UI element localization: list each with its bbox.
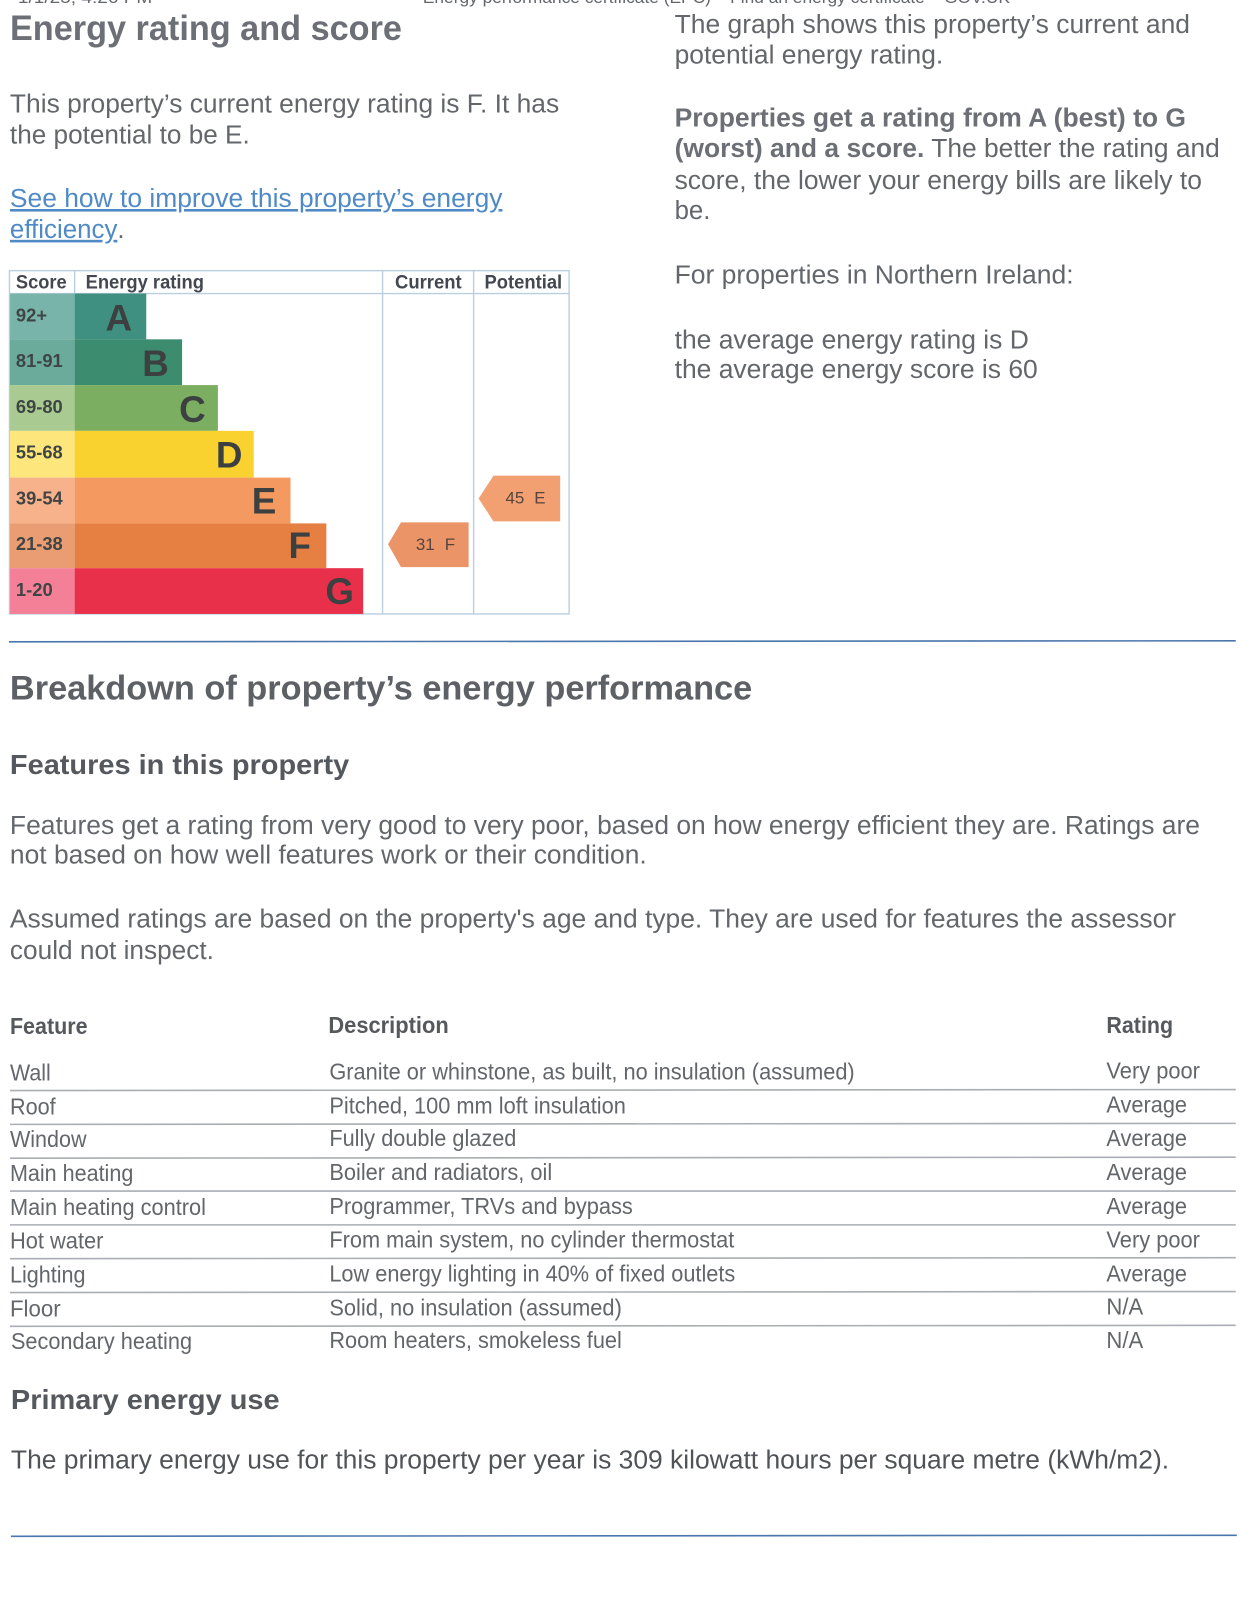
text block: graph explanation: potential energy rating.: [675, 42, 943, 70]
text block: features explanation: Assumed ratings are based on the property's age and type. They are used for features the assessor: [10, 905, 1176, 933]
clipped browser print header: [18, 0, 1011, 7]
row: hot water: From main system, no cylinder thermostat: [329, 1227, 735, 1253]
band D: 55-68: [16, 442, 63, 463]
arrow: potential rating 45 E: 45: [505, 488, 524, 507]
chart header row: Potential: [485, 272, 562, 294]
row: wall: [10, 1058, 1200, 1086]
text block: Northern Ireland averages: the average energy score is 60: [675, 356, 1038, 384]
row: wall: Granite or whinstone, as built, no insulation (assumed): [329, 1059, 855, 1085]
row: main heating: Boiler and radiators, oil: [329, 1159, 552, 1185]
band A: [10, 294, 146, 339]
row: main heating control: Average: [1106, 1193, 1187, 1219]
row: secondary heating: Room heaters, smokeless fuel: [329, 1327, 622, 1353]
row: hot water: [10, 1227, 1200, 1254]
text block: Northern Ireland averages: [675, 262, 1074, 384]
table header: Description: [328, 1012, 449, 1038]
band G: G: [325, 571, 354, 612]
text block: graph explanation: [675, 11, 1220, 225]
chart: energy rating bands: [9, 271, 569, 614]
band C: 69-80: [16, 396, 63, 417]
text block: Northern Ireland averages: For properties in Northern Ireland:: [675, 262, 1074, 290]
row: window: Fully double glazed: [329, 1125, 516, 1151]
band B: B: [142, 343, 169, 384]
row: roof: Roof: [10, 1093, 56, 1119]
band C: C: [179, 389, 206, 430]
text block: graph explanation: be.: [675, 197, 710, 225]
row: roof: Pitched, 100 mm loft insulation: [329, 1092, 626, 1118]
link: improve energy efficiency: See how to improve this property’s energy: [10, 185, 503, 213]
text block: graph explanation: (worst) and a score.: [675, 135, 924, 163]
band A: A: [105, 297, 132, 338]
row: main heating: Average: [1106, 1159, 1187, 1185]
link: improve energy efficiency: [10, 185, 503, 244]
band F: 21-38: [16, 533, 63, 554]
chart header row: Score: [16, 272, 67, 294]
subheading: primary energy use: Primary energy use: [11, 1384, 280, 1415]
table header: Feature: [10, 1013, 88, 1039]
link: improve energy efficiency: .: [117, 216, 125, 244]
chart header row: Current: [395, 272, 462, 294]
band E: 39-54: [16, 487, 63, 508]
text block: current rating summary: [10, 90, 559, 149]
row: floor: [10, 1293, 1144, 1321]
text block: current rating summary: the potential to be E.: [10, 121, 250, 149]
arrow: current rating 31 F: 31: [416, 535, 435, 554]
link: improve energy efficiency: efficiency: [10, 216, 117, 244]
text block: graph explanation: Properties get a rating from A (best) to G: [675, 104, 1186, 132]
text block: features explanation: Features get a rating from very good to very poor, based on how energy efficient they are. Ratings are: [10, 812, 1200, 840]
arrow: current rating 31 F: F: [445, 535, 455, 554]
band C: [10, 385, 218, 431]
band F: [10, 523, 326, 568]
row: main heating: [10, 1159, 1187, 1186]
row: secondary heating: Secondary heating: [11, 1328, 192, 1354]
subheading: features in this property: Features in this property: [10, 749, 350, 780]
text block: Northern Ireland averages: the average energy rating is D: [675, 326, 1029, 354]
text block: features explanation: not based on how well features work or their condition.: [10, 842, 647, 870]
band E: [10, 478, 291, 523]
band F: F: [289, 525, 311, 566]
row: floor: Solid, no insulation (assumed): [329, 1294, 622, 1320]
row: lighting: Average: [1106, 1261, 1187, 1287]
row: hot water: Very poor: [1106, 1227, 1200, 1253]
band B: [10, 339, 182, 385]
band D: [10, 431, 254, 478]
band B: 81-91: [16, 350, 63, 371]
row: floor: N/A: [1106, 1293, 1144, 1319]
row: main heating control: Main heating control: [10, 1194, 206, 1220]
row: floor: Floor: [10, 1295, 61, 1321]
arrow: current rating 31 F: [388, 522, 469, 567]
heading: breakdown: Breakdown of property’s energy performance: [10, 670, 752, 708]
band A: 92+: [16, 304, 47, 325]
chart header row: [16, 272, 562, 294]
row: main heating: Main heating: [10, 1160, 133, 1186]
row: main heating control: [10, 1193, 1187, 1220]
band G: [10, 568, 363, 614]
text block: graph explanation: The graph shows this property’s current and: [675, 11, 1190, 39]
row: roof: Average: [1106, 1091, 1187, 1117]
text block: current rating summary: This property’s current energy rating is F. It has: [10, 90, 559, 118]
table header: [10, 1012, 1173, 1039]
band D: D: [216, 435, 242, 476]
text block: graph explanation: score, the lower your energy bills are likely to: [675, 167, 1202, 195]
heading: energy rating and score: Energy rating and score: [10, 9, 402, 48]
text block: primary energy use: The primary energy use for this property per year is 309 kilowatt hours per square metre (kWh/m2).: [11, 1447, 1169, 1475]
row: window: Window: [10, 1126, 87, 1152]
text block: graph explanation: The better the rating and: [931, 135, 1220, 163]
row: wall: Very poor: [1106, 1058, 1200, 1084]
row: window: [10, 1125, 1187, 1152]
row: main heating control: Programmer, TRVs and bypass: [329, 1193, 633, 1219]
table: features: [10, 1012, 1236, 1354]
row: hot water: Hot water: [10, 1228, 104, 1254]
row: lighting: Low energy lighting in 40% of fixed outlets: [329, 1261, 735, 1287]
arrow: potential rating 45 E: [479, 476, 560, 521]
row: lighting: [10, 1261, 1187, 1288]
row: window: Average: [1106, 1125, 1187, 1151]
row: lighting: Lighting: [10, 1262, 86, 1288]
text block: features explanation: could not inspect.: [10, 937, 214, 965]
row: secondary heating: N/A: [1106, 1327, 1144, 1353]
arrow: potential rating 45 E: E: [534, 488, 546, 507]
row: roof: [10, 1091, 1187, 1119]
band E: E: [252, 480, 276, 521]
row: wall: Wall: [10, 1060, 51, 1086]
band G: 1-20: [16, 579, 53, 600]
text block: features explanation: [10, 812, 1200, 965]
row: secondary heating: [11, 1327, 1144, 1354]
chart header row: Energy rating: [86, 272, 204, 294]
table header: Rating: [1106, 1012, 1173, 1038]
